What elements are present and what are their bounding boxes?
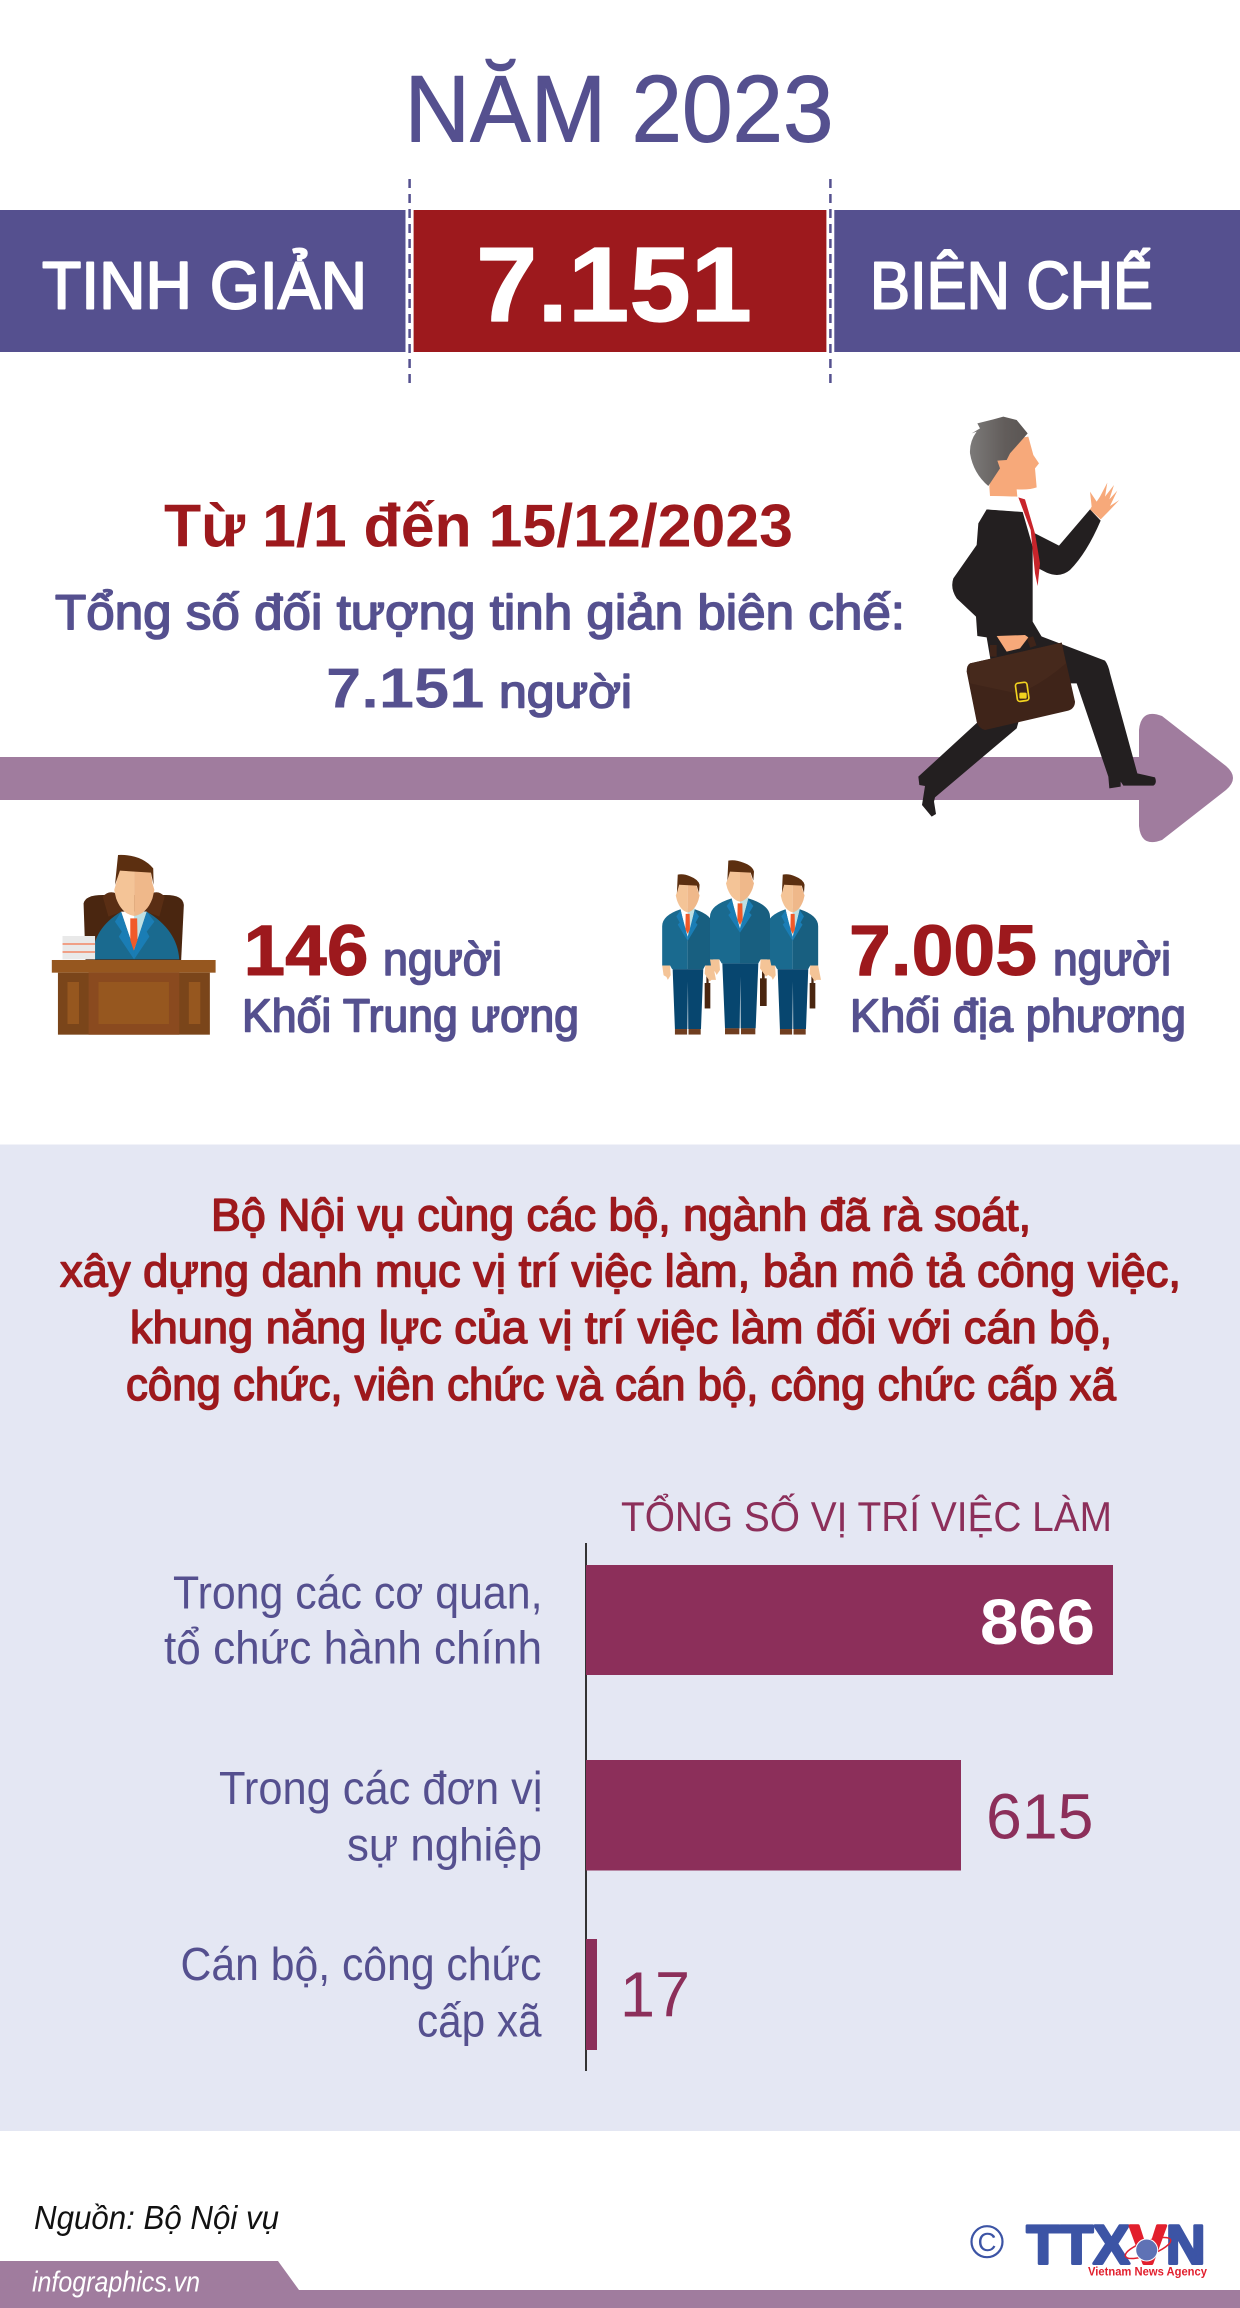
banner: right segment	[834, 210, 1240, 352]
logo: TTXVN: Vietnam News Agency	[1088, 2265, 1207, 2279]
bar: commune officials 17: 17	[620, 1958, 690, 2030]
bar: administrative agencies 866	[586, 1565, 1113, 1675]
banner: right segment: BIÊN CHẾ	[870, 249, 1153, 324]
unit: central: người	[383, 933, 502, 985]
value: local: 7.005	[849, 912, 1037, 991]
total count: 7.151	[326, 657, 484, 721]
category label: commune officials	[180, 1938, 542, 2047]
banner: centre figure: 7.151	[476, 226, 752, 344]
label: local: Khối địa phương	[850, 990, 1186, 1042]
bar: commune officials 17	[586, 1939, 690, 2050]
category label: public service units	[219, 1762, 542, 1871]
arrow	[0, 714, 1233, 842]
bar: administrative agencies 866: 866	[980, 1586, 1095, 1658]
bar: public service units 615: 615	[986, 1780, 1094, 1852]
icon: copyright: C	[978, 2227, 996, 2257]
chart heading: TỔNG SỐ VỊ TRÍ VIỆC LÀM	[621, 1491, 1112, 1540]
footer band: infographics.vn	[32, 2267, 200, 2299]
date heading: Từ 1/1 đến 15/12/2023	[164, 493, 793, 560]
bar: public service units 615	[586, 1760, 1094, 1870]
icon: official at desk	[52, 855, 216, 1035]
icon: globe	[1123, 2233, 1173, 2263]
category label: commune officials: Cán bộ, công chức	[180, 1938, 542, 1990]
paragraph: Bộ Nội vụ cùng các bộ, ngành đã rà soát,	[211, 1190, 1031, 1241]
value: central: 146	[244, 912, 368, 991]
category label: administrative agencies	[164, 1566, 542, 1674]
category label: public service units: Trong các đơn vị	[219, 1762, 542, 1814]
footer band	[0, 2261, 1240, 2308]
total count: người	[499, 666, 632, 718]
banner: left segment	[0, 210, 406, 352]
category label: public service units: sự nghiệp	[347, 1819, 542, 1871]
paragraph: công chức, viên chức và cán bộ, công chức cấp xã	[126, 1359, 1117, 1410]
title: NĂM 2023	[404, 57, 834, 163]
block: local	[662, 860, 1186, 1042]
banner: left segment: TINH GIẢN	[42, 249, 367, 324]
label: central: Khối Trung ương	[242, 990, 579, 1042]
bar chart	[164, 1491, 1113, 2071]
logo: TTXVN: TTXVN	[1026, 2214, 1206, 2276]
paragraph: khung năng lực của vị trí việc làm đối với cán bộ,	[130, 1302, 1112, 1353]
panel: job positions	[0, 1144, 1240, 2131]
paragraph: xây dựng danh mục vị trí việc làm, bản mô tả công việc,	[60, 1246, 1181, 1297]
paragraph	[60, 1190, 1181, 1410]
block: central	[52, 855, 579, 1042]
icon: running businessman	[918, 417, 1156, 817]
category label: commune officials: cấp xã	[417, 1995, 542, 2047]
header banner	[0, 179, 1240, 384]
source: Nguồn: Bộ Nội vụ	[34, 2199, 279, 2236]
icon: three officials	[662, 860, 821, 1035]
category label: administrative agencies: tổ chức hành chính	[164, 1622, 542, 1674]
summary text: Tổng số đối tượng tinh giản biên chế:	[55, 586, 905, 640]
category label: administrative agencies: Trong các cơ quan,	[173, 1566, 542, 1618]
icon: copyright	[972, 2226, 1002, 2257]
banner: centre figure	[414, 210, 826, 352]
unit: local: người	[1053, 933, 1171, 985]
total count	[326, 657, 632, 721]
